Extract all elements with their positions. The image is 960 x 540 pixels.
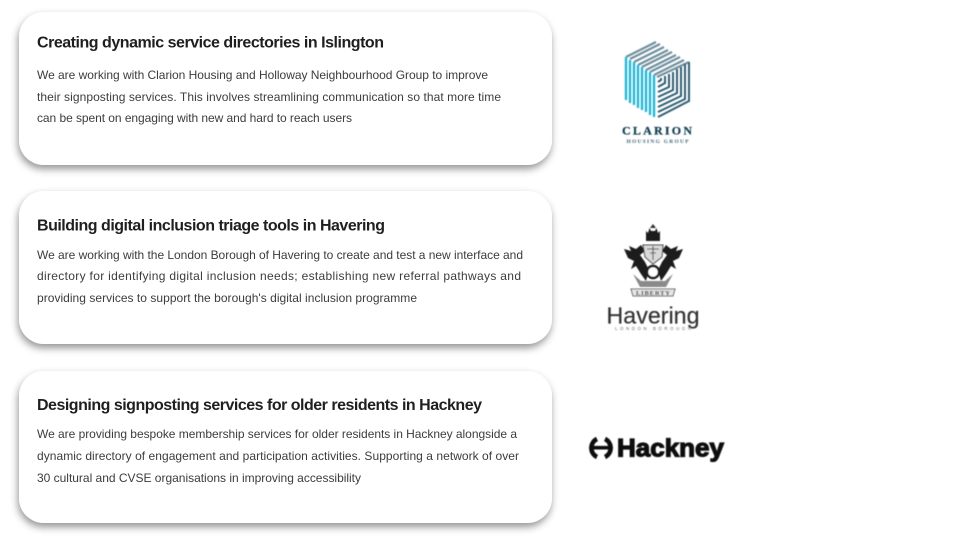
cube top stripes (626, 42, 689, 77)
panel: Havering card (19, 191, 552, 344)
text block: Havering description: We are working with the London Borough of Havering to create and test a new interface and (37, 248, 523, 262)
crest towers (646, 228, 660, 241)
text block: Havering description (37, 248, 523, 305)
text block: Islington description: can be spent on engaging with new and hard to reach users (37, 111, 352, 125)
panel: Islington card (19, 12, 552, 165)
text block: Havering description: directory for identifying digital inclusion needs; establishing new referral pathways and (37, 269, 521, 283)
panel: Hackney card (19, 371, 552, 523)
Clarion wordmark: CLARION (622, 124, 692, 138)
card background (19, 371, 552, 523)
Havering wordmark: Havering (606, 302, 700, 328)
card background (19, 12, 552, 165)
cube right nested chevrons (658, 62, 689, 117)
Hackney wordmark: Hackney (617, 434, 724, 462)
text block: Hackney description: We are providing bespoke membership services for older residents in Hackney alongside a (37, 427, 517, 441)
text block: Islington description (37, 68, 501, 125)
heading: Islington: Creating dynamic service directories in Islington (37, 34, 384, 52)
text block: Hackney description (37, 427, 519, 485)
Hackney H emblem (591, 439, 611, 457)
icon: Havering London Borough crest and logo (606, 224, 700, 331)
text block: Islington description: We are working with Clarion Housing and Holloway Neighbourhood Group to improve (37, 68, 488, 82)
crest centre shield (643, 245, 663, 264)
text block: Hackney description: 30 cultural and CVSE organisations in improving accessibility (37, 471, 361, 485)
text block: Islington description: their signposting services. This involves streamlining communication so that more time (37, 90, 501, 104)
cube left stripes (626, 57, 654, 117)
Liberty motto: LIBERTY (636, 290, 670, 297)
heading: Hackney: Designing signposting services for older residents in Hackney (37, 397, 482, 414)
Housing Group text: HOUSING GROUP (626, 139, 689, 145)
crest ring (647, 266, 659, 278)
card background (19, 191, 552, 344)
crest helm top (650, 224, 656, 228)
crest mantling right (658, 245, 683, 281)
text block: Havering description: providing services to support the borough's digital inclusion programme (37, 291, 417, 305)
crest lower mantling (633, 274, 673, 287)
crest mantling left (624, 245, 649, 281)
icon: Clarion Housing Group logo (622, 42, 692, 145)
crest centre detail (647, 246, 659, 260)
heading: Havering: Building digital inclusion triage tools in Havering (37, 218, 385, 234)
icon: Hackney logo (591, 434, 724, 462)
text block: Hackney description: dynamic directory of engagement and participation activities. Supporting a network of over (37, 449, 519, 463)
London Borough text: LONDON BOROUGH (615, 326, 691, 331)
